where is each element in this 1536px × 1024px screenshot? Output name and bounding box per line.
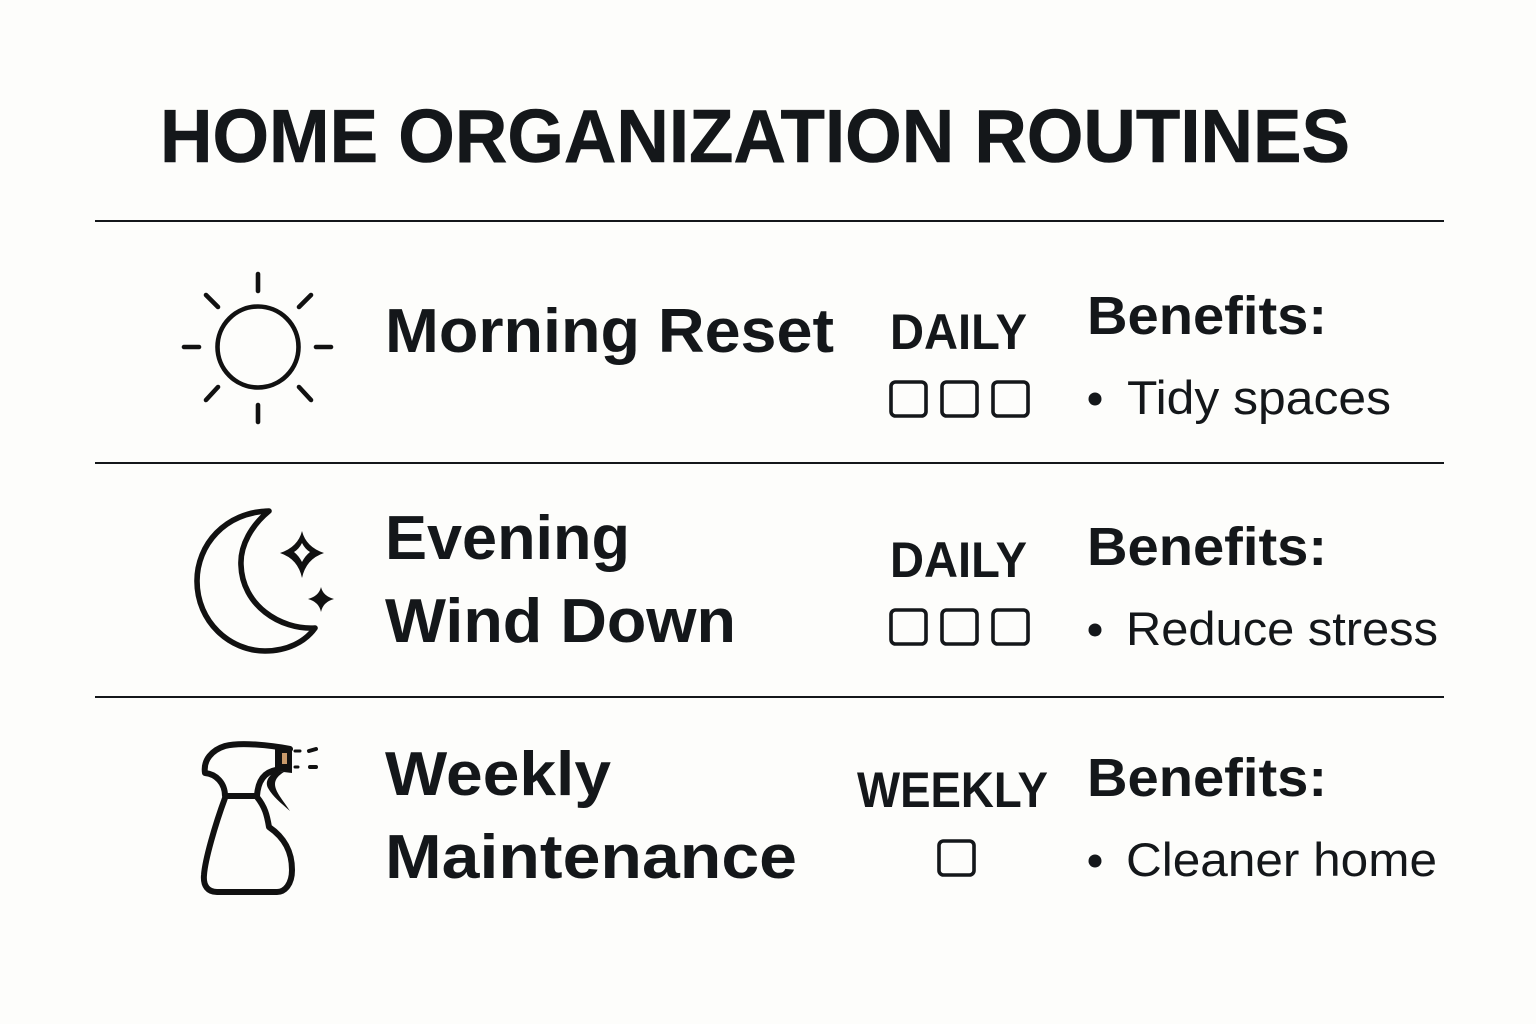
frequency: daily: DAILY [890, 304, 1027, 360]
benefits: weekly maintenance: Cleaner home [1126, 833, 1437, 886]
icon: moon and stars [197, 511, 334, 651]
benefits: weekly maintenance [1087, 748, 1437, 886]
routine name: weekly maintenance [385, 740, 797, 892]
routine name: morning reset: Morning Reset [385, 297, 834, 366]
panel: morning reset row [184, 274, 1391, 424]
routine name: weekly maintenance: Maintenance [385, 823, 797, 892]
routine name: evening wind down: Evening [385, 504, 630, 573]
benefits: evening wind down: Reduce stress [1126, 602, 1438, 655]
panel: weekly maintenance row [204, 740, 1437, 892]
frequency: daily [890, 532, 1028, 644]
routine name: weekly maintenance: Weekly [385, 740, 612, 809]
benefits: morning reset [1087, 286, 1391, 424]
frequency: daily [890, 304, 1028, 416]
icon: sun [184, 274, 331, 422]
benefits: weekly maintenance: Benefits: [1087, 748, 1327, 808]
benefits: morning reset: Benefits: [1087, 286, 1327, 346]
icon: spray bottle [204, 744, 316, 892]
panel: evening wind down row [197, 504, 1438, 656]
benefits: evening wind down: Benefits: [1087, 517, 1327, 577]
benefits: morning reset: Tidy spaces [1127, 371, 1391, 424]
title: HOME ORGANIZATION ROUTINES [160, 94, 1350, 178]
frequency: weekly: WEEKLY [857, 762, 1048, 818]
routine name: evening wind down [385, 504, 736, 656]
frequency: daily: DAILY [890, 532, 1027, 588]
benefits: evening wind down [1087, 517, 1438, 655]
routine name: evening wind down: Wind Down [385, 587, 736, 656]
frequency: weekly [857, 762, 1048, 875]
